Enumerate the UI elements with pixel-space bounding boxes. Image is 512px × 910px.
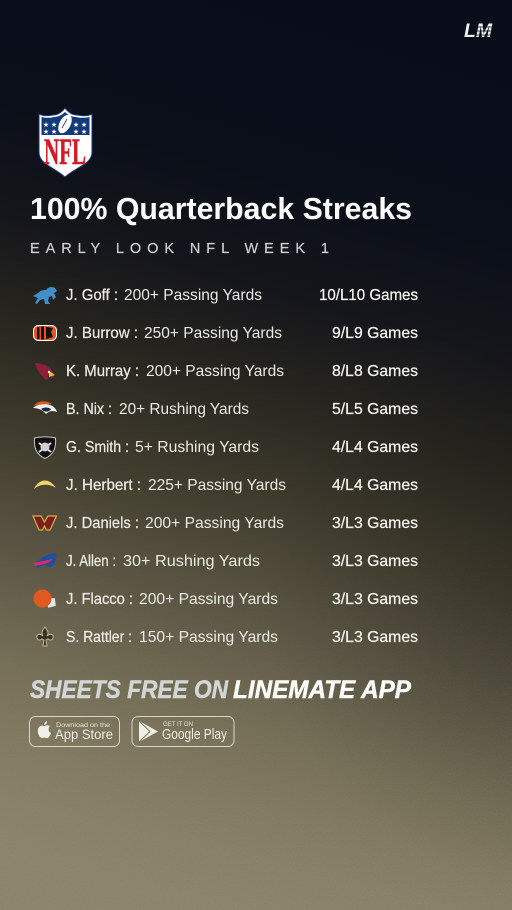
row: Daniels: J. Daniels : xyxy=(66,515,139,532)
row: Goff: 200+ Passing Yards xyxy=(124,287,262,304)
logo: Linemate: LM xyxy=(464,21,493,42)
call to action: LINEMATE APP xyxy=(233,676,411,704)
row: Allen xyxy=(33,553,418,570)
list of streaks xyxy=(33,287,418,646)
row: Herbert: J. Herbert : xyxy=(66,477,141,494)
icon: NFL shield: ★ xyxy=(81,128,87,136)
icon: NFL shield: ★ xyxy=(73,128,79,136)
row: Flacco xyxy=(34,590,418,608)
row: Rattler: 150+ Passing Yards xyxy=(139,629,278,646)
row: Allen: J. Allen : xyxy=(66,553,116,570)
icon: NFL shield: ★ xyxy=(73,121,79,129)
call to action xyxy=(30,676,411,704)
button: App Store: App Store xyxy=(55,726,113,742)
row: Nix: 20+ Rushing Yards xyxy=(119,401,249,418)
row: Nix: B. Nix : xyxy=(66,401,112,418)
icon: NFL shield: ★ xyxy=(43,121,49,129)
row: Smith xyxy=(34,437,418,458)
row: Flacco: 3/L3 Games xyxy=(332,591,418,608)
row: Burrow: J. Burrow : xyxy=(66,325,138,342)
row: Rattler: S. Rattler : xyxy=(66,629,132,646)
row: Allen: 30+ Rushing Yards xyxy=(123,553,260,570)
button: App Store: Download on the xyxy=(56,722,110,729)
row: Nix: 5/L5 Games xyxy=(332,401,418,418)
row: Flacco: J. Flacco : xyxy=(66,591,133,608)
row: Murray: 8/L8 Games xyxy=(332,363,418,380)
icon: NFL shield: ★ xyxy=(51,128,57,136)
row: Daniels: 200+ Passing Yards xyxy=(145,515,284,532)
row: Goff: 10/L10 Games xyxy=(319,287,418,304)
call to action: SHEETS FREE ON xyxy=(30,676,229,704)
button: Google Play xyxy=(132,716,234,746)
row: Herbert xyxy=(34,477,418,494)
row: Burrow xyxy=(34,325,418,342)
row: Daniels: 3/L3 Games xyxy=(332,515,418,532)
row: Goff: J. Goff : xyxy=(66,287,118,304)
row: Smith: G. Smith : xyxy=(66,439,129,456)
row: Herbert: 225+ Passing Yards xyxy=(148,477,286,494)
icon: NFL shield xyxy=(39,108,92,177)
button: Google Play: Google Play xyxy=(162,727,228,743)
row: Murray xyxy=(35,363,418,380)
row: Rattler: 3/L3 Games xyxy=(332,629,418,646)
title: 100% Quarterback Streaks xyxy=(30,191,412,226)
row: Rattler xyxy=(37,627,418,646)
subtitle: EARLY LOOK NFL WEEK 1 xyxy=(30,241,329,257)
row: Flacco: 200+ Passing Yards xyxy=(139,591,278,608)
row: Goff xyxy=(33,287,418,304)
row: Smith: 4/L4 Games xyxy=(332,439,418,456)
row: Burrow: 250+ Passing Yards xyxy=(144,325,282,342)
row: Smith: 5+ Rushing Yards xyxy=(135,439,259,456)
row: Nix xyxy=(33,401,418,418)
icon: NFL shield: ★ xyxy=(81,121,87,129)
button: App Store xyxy=(30,716,120,746)
icon: NFL shield: NFL xyxy=(44,132,86,173)
row: Herbert: 4/L4 Games xyxy=(332,477,418,494)
icon: NFL shield: ★ xyxy=(43,128,49,136)
icon: NFL shield: ★ xyxy=(51,121,57,129)
row: Daniels xyxy=(33,515,418,532)
row: Allen: 3/L3 Games xyxy=(332,553,418,570)
button: Google Play: GET IT ON xyxy=(163,721,193,728)
row: Murray: 200+ Passing Yards xyxy=(146,363,284,380)
row: Burrow: 9/L9 Games xyxy=(332,325,418,342)
row: Murray: K. Murray : xyxy=(66,363,139,380)
